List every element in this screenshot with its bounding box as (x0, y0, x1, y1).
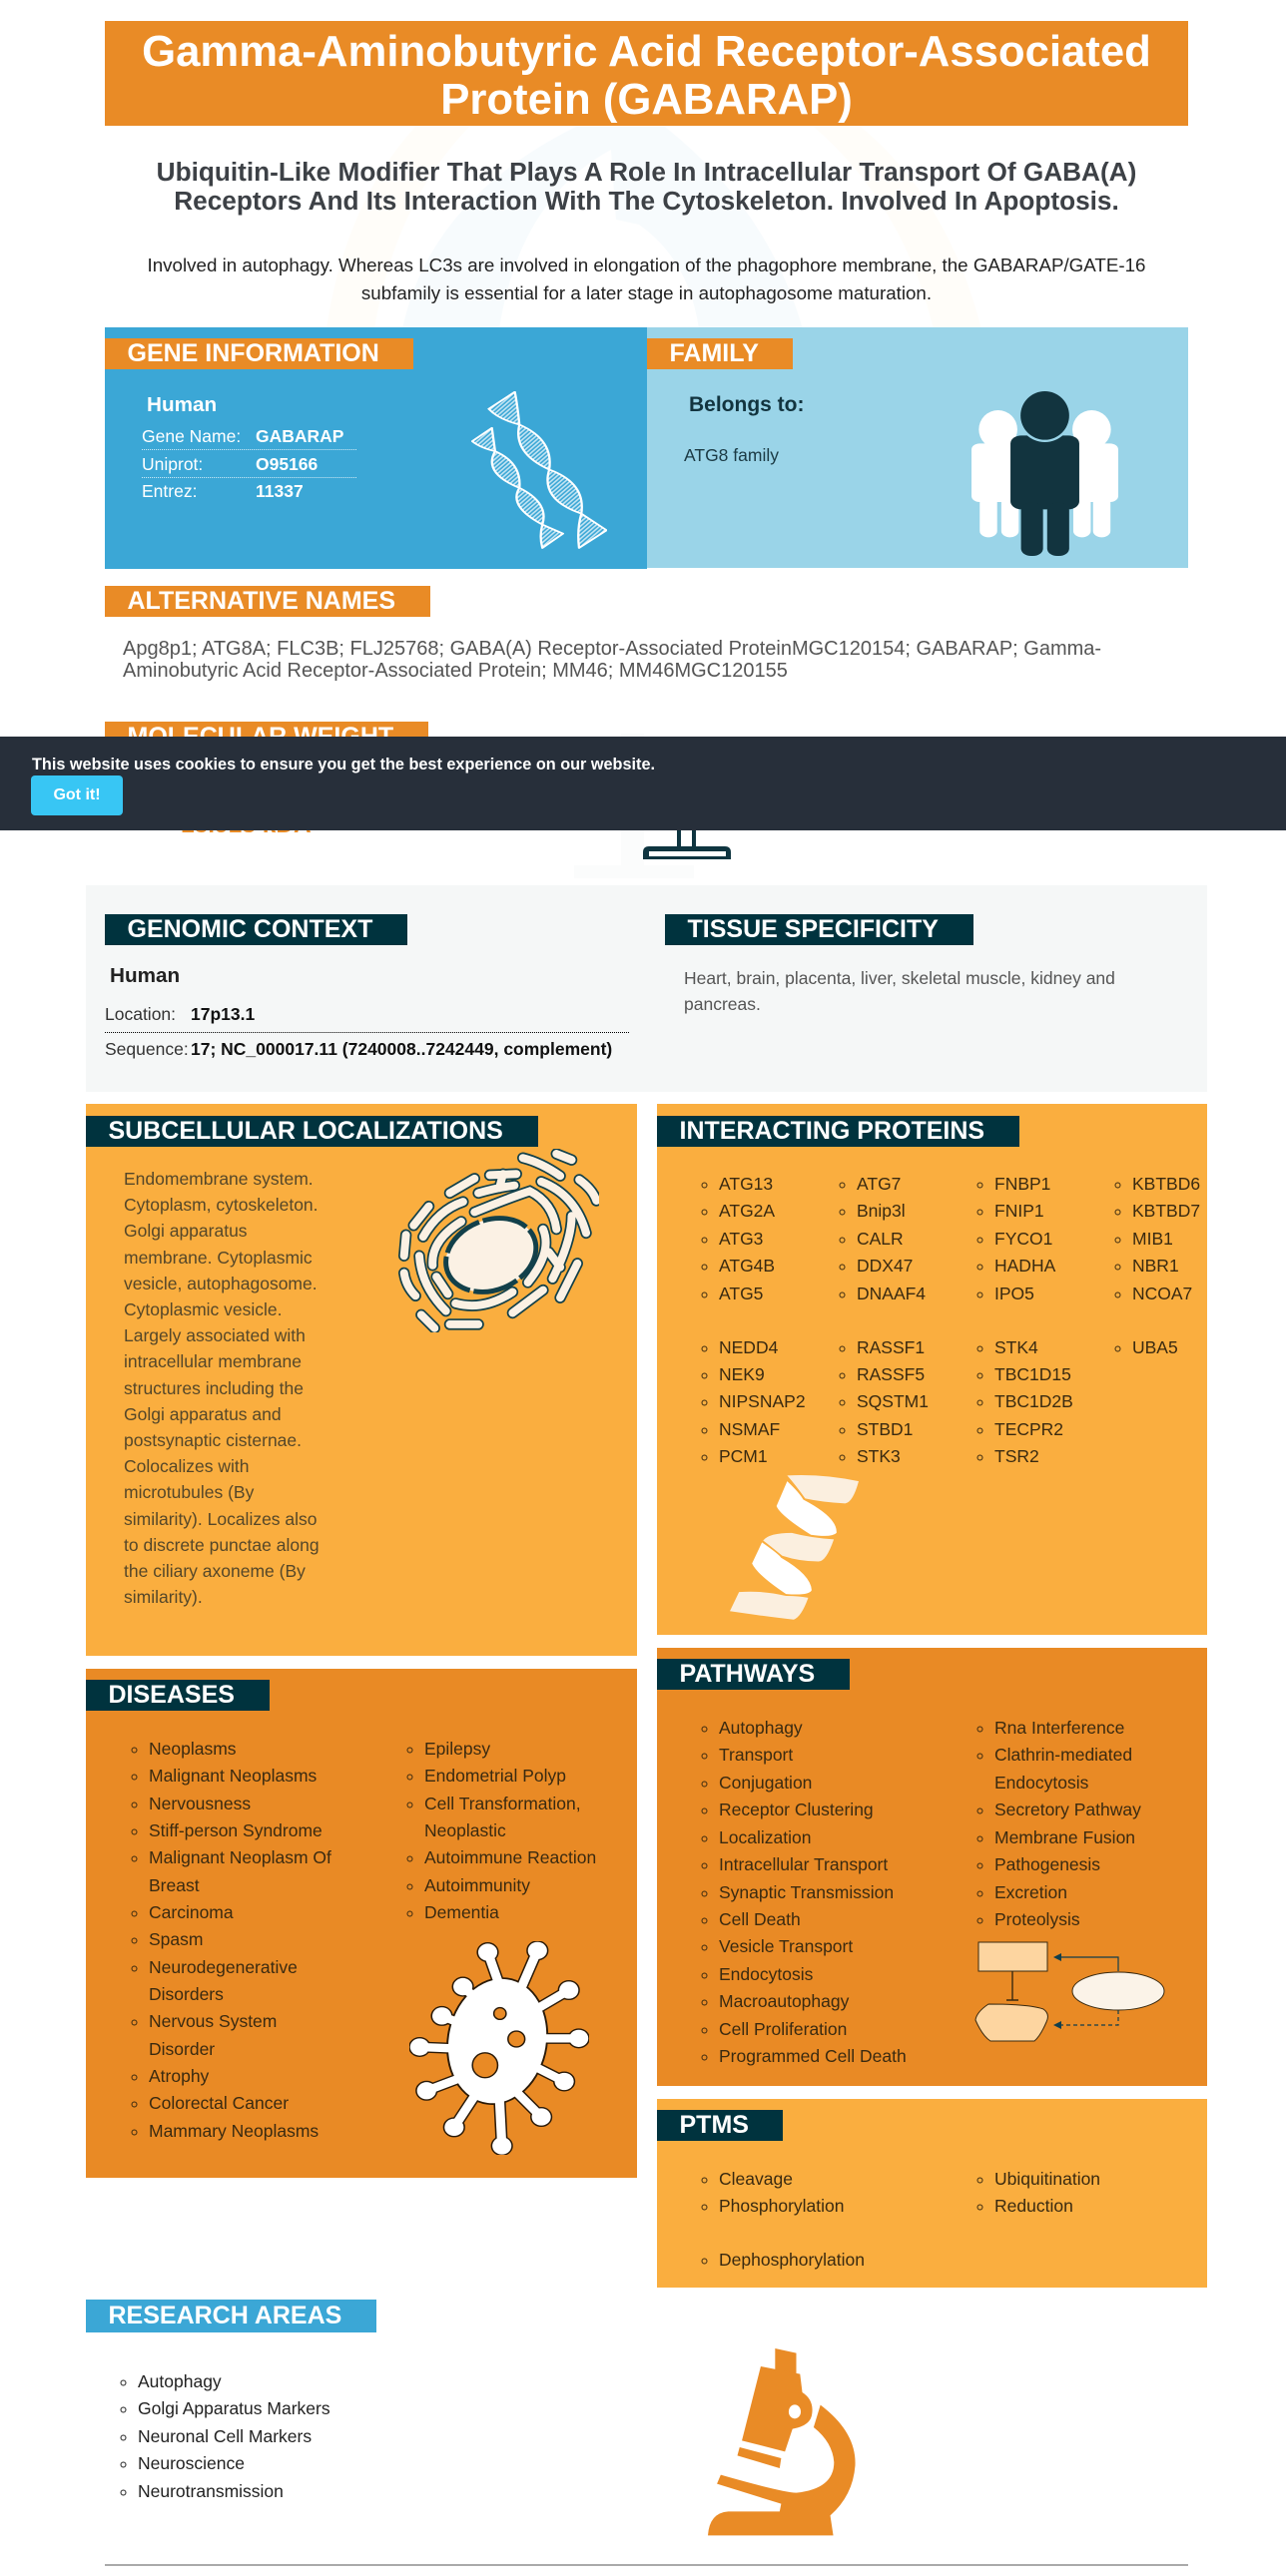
protein list: column 3 group 1: IPO5 (994, 1284, 1034, 1303)
research areas list: Autophagy (138, 2371, 222, 2391)
heading: interacting proteins: INTERACTING PROTEINS (679, 1117, 984, 1145)
tissue text: Heart, brain, placenta, liver, skeletal muscle, kidney and (684, 968, 1115, 988)
protein list: column 4 group 1 (1114, 1174, 1200, 1303)
panel: gene information (105, 327, 647, 569)
location row: Location: (105, 1004, 176, 1024)
protein list: column 3 group 1 (976, 1174, 1056, 1303)
panel: subcellular localizations (86, 1104, 637, 1656)
protein list: column 3 group 1: FNBP1 (994, 1174, 1050, 1194)
heading: research areas: RESEARCH AREAS (108, 2302, 341, 2329)
protein list: column 1 group 2: PCM1 (719, 1446, 768, 1466)
panel: genomic context and tissue specificity (86, 885, 1207, 1092)
protein list: column 2 group 2 (839, 1337, 929, 1466)
localization text: microtubules (By (124, 1482, 254, 1502)
localization text: Cytoplasm, cytoskeleton. (124, 1195, 319, 1215)
panel: ptms (657, 2099, 1207, 2288)
localization text: to discrete punctae along (124, 1535, 320, 1555)
pathway list: column 2: Rna Interference (994, 1718, 1124, 1738)
title banner: Gamma-Aminobutyric Acid Receptor-Associated (142, 27, 1151, 76)
species label: Human (110, 964, 180, 987)
pathway list: column 1: Autophagy (719, 1718, 803, 1738)
heading: diseases (86, 1680, 270, 1711)
species label: Human (147, 393, 217, 416)
icon: microscope (708, 2348, 856, 2535)
protein list: column 1 group 1 (701, 1174, 775, 1303)
subtitle (157, 157, 1136, 216)
heading: gene information: GENE INFORMATION (128, 339, 379, 367)
research areas list: Neuronal Cell Markers (138, 2426, 312, 2446)
ptm list: column 2 (976, 2169, 1100, 2216)
localization text (124, 1169, 320, 1607)
disease list: column 1: Disorder (149, 2039, 215, 2059)
protein list: column 1 group 1: ATG13 (719, 1174, 773, 1194)
tissue text (684, 968, 1115, 1014)
sequence row (105, 1039, 612, 1059)
pathway list: column 1: Intracellular Transport (719, 1854, 888, 1874)
protein list: column 2 group 2: STK3 (857, 1446, 901, 1466)
belongs to label: Belongs to: (689, 393, 805, 416)
disease list: column 2: Autoimmunity (424, 1875, 530, 1895)
panel: genomic context and tissue specificity: 17; NC_000017.11 (7240008..7242449, complement) (191, 1039, 612, 1059)
protein list: column 3 group 2: TSR2 (994, 1446, 1039, 1466)
protein list: column 4 group 1: NCOA7 (1132, 1284, 1192, 1303)
localization text: Largely associated with (124, 1325, 306, 1345)
disease list: column 1: Malignant Neoplasm Of (149, 1847, 331, 1867)
pathway list: column 2: Pathogenesis (994, 1854, 1100, 1874)
localization text: Golgi apparatus and (124, 1404, 282, 1424)
protein list: column 3 group 2: TECPR2 (994, 1419, 1063, 1439)
protein list: column 4 group 1: KBTBD6 (1132, 1174, 1200, 1194)
panel: interacting proteins (657, 1104, 1207, 1635)
disease list: column 1: Mammary Neoplasms (149, 2121, 319, 2141)
cookie message: This website uses cookies to ensure you get the best experience on our website. (32, 756, 655, 773)
localization text: postsynaptic cisternae. (124, 1430, 302, 1450)
icon: DNA helix (471, 391, 607, 549)
location row: 17p13.1 (191, 1004, 255, 1024)
disease list: column 1: Breast (149, 1875, 200, 1895)
icon: virus (409, 1941, 589, 2155)
disease list: column 1: Colorectal Cancer (149, 2093, 289, 2113)
protein list: column 2 group 2: RASSF1 (857, 1337, 925, 1357)
protein list: column 2 group 2: RASSF5 (857, 1364, 925, 1384)
localization text: Cytoplasmic vesicle. (124, 1299, 283, 1319)
disease list: column 1: Malignant Neoplasms (149, 1766, 317, 1786)
pathway list: column 1: Receptor Clustering (719, 1800, 874, 1819)
heading: tissue specificity: TISSUE SPECIFICITY (687, 915, 939, 943)
protein list: column 2 group 1 (839, 1174, 926, 1303)
gene name row (142, 424, 356, 450)
disease list: column 1: Neurodegenerative (149, 1957, 298, 1977)
localization text: vesicle, autophagosome. (124, 1274, 318, 1293)
disease list: column 2 (407, 1739, 596, 1922)
alternative names text: Apg8p1; ATG8A; FLC3B; FLJ25768; GABA(A) Receptor-Associated ProteinMGC120154; GABARAP; Gamma- (123, 638, 1101, 660)
molecular weight value: 13.918 kDA (181, 811, 312, 838)
subtitle: Ubiquitin-Like Modifier That Plays A Role In Intracellular Transport Of GABA(A) (157, 157, 1136, 187)
protein list: column 1 group 2: NIPSNAP2 (719, 1391, 806, 1411)
protein list: column 2 group 2: SQSTM1 (857, 1391, 929, 1411)
subtitle: Receptors And Its Interaction With The Cytoskeleton. Involved In Apoptosis. (174, 186, 1119, 216)
heading: diseases: DISEASES (108, 1681, 235, 1709)
icon: organelle (398, 1149, 599, 1332)
sequence row: Sequence: (105, 1039, 189, 1059)
disease list: column 1: Stiff-person Syndrome (149, 1820, 322, 1840)
pathway list: column 2: Excretion (994, 1882, 1067, 1902)
protein list: column 3 group 2 (976, 1337, 1073, 1466)
disease list: column 1: Carcinoma (149, 1902, 234, 1922)
protein list: column 1 group 2 (701, 1337, 806, 1466)
heading: family (647, 338, 793, 369)
heading: research areas (86, 2300, 376, 2332)
disease list: column 2: Endometrial Polyp (424, 1766, 566, 1786)
pathway list: column 1: Endocytosis (719, 1964, 813, 1984)
heading: ptms: PTMS (679, 2111, 749, 2139)
description: subfamily is essential for a later stage in autophagosome maturation. (361, 282, 932, 303)
protein list: column 3 group 1: HADHA (994, 1256, 1055, 1276)
diagram: pathway schematic (974, 1942, 1164, 2042)
heading: alternative names: ALTERNATIVE NAMES (128, 587, 395, 615)
protein list: column 1 group 1: ATG5 (719, 1284, 763, 1303)
ptm list: column 1 (701, 2169, 865, 2270)
protein list: column 3 group 2: TBC1D2B (994, 1391, 1073, 1411)
disease list: column 2: Cell Transformation, (424, 1794, 581, 1813)
protein list: column 3 group 1: FYCO1 (994, 1229, 1052, 1249)
ptm list: column 1: Phosphorylation (719, 2196, 845, 2216)
uniprot row (142, 452, 356, 478)
footer rule (105, 2564, 1188, 2566)
disease list: column 1: Nervousness (149, 1794, 251, 1813)
disease list: column 1: Neoplasms (149, 1739, 237, 1759)
title banner: Protein (GABARAP) (440, 74, 853, 124)
disease list: column 2: Neoplastic (424, 1820, 506, 1840)
localization text: similarity). (124, 1587, 203, 1607)
disease list: column 1: Disorders (149, 1984, 224, 2004)
panel: diseases (86, 1669, 637, 2178)
pathway list: column 1: Transport (719, 1745, 793, 1765)
protein list: column 1 group 1: ATG2A (719, 1201, 775, 1221)
entrez row: Entrez: (142, 481, 197, 501)
tissue text: pancreas. (684, 994, 761, 1014)
gene name row: Gene Name: (142, 426, 241, 446)
disease list: column 2: Epilepsy (424, 1739, 490, 1759)
entrez row (142, 481, 304, 501)
protein list: column 3 group 2: TBC1D15 (994, 1364, 1071, 1384)
gene name row: GABARAP (256, 426, 343, 446)
alternative names text: Aminobutyric Acid Receptor-Associated Protein; MM46; MM46MGC120155 (123, 660, 788, 682)
pathway list: column 1 (701, 1718, 907, 2066)
protein list: column 1 group 1: ATG4B (719, 1256, 775, 1276)
pathway list: column 1: Cell Proliferation (719, 2019, 847, 2039)
protein list: column 1 group 2: NEDD4 (719, 1337, 778, 1357)
description: Involved in autophagy. Whereas LC3s are involved in elongation of the phagophore membrane, the GABARAP/GATE-16 (148, 255, 1145, 275)
family name: ATG8 family (684, 445, 779, 465)
cookie button: Got it! (53, 786, 101, 803)
disease list: column 1: Spasm (149, 1929, 203, 1949)
localization text: intracellular membrane (124, 1351, 302, 1371)
uniprot row: O95166 (256, 454, 318, 474)
protein list: column 1 group 1: ATG3 (719, 1229, 763, 1249)
icon: people (971, 391, 1118, 556)
title banner (105, 21, 1188, 126)
disease list: column 1 (132, 1739, 331, 2141)
localization text: similarity). Localizes also (124, 1509, 318, 1529)
protein list: column 3 group 2: STK4 (994, 1337, 1038, 1357)
pathway list: column 2: Clathrin-mediated (994, 1745, 1132, 1765)
research areas list: Neuroscience (138, 2453, 245, 2473)
heading: pathways: PATHWAYS (679, 1660, 815, 1688)
localization text: the ciliary axoneme (By (124, 1561, 306, 1581)
pathway list: column 2: Membrane Fusion (994, 1827, 1135, 1847)
pathway list: column 1: Cell Death (719, 1909, 801, 1929)
protein list: column 3 group 1: FNIP1 (994, 1201, 1044, 1221)
ptm list: column 1: Dephosphorylation (719, 2250, 865, 2270)
background watermark (0, 0, 1286, 898)
heading: subcellular localizations: SUBCELLULAR LOCALIZATIONS (108, 1117, 503, 1145)
panel: family (647, 327, 1188, 568)
icon: monitor stand (643, 830, 731, 859)
location row (105, 1002, 629, 1033)
localization text: structures including the (124, 1378, 304, 1398)
pathway list: column 1: Vesicle Transport (719, 1936, 853, 1956)
pathway list: column 1: Localization (719, 1827, 811, 1847)
protein list: column 2 group 1: ATG7 (857, 1174, 901, 1194)
pathway list: column 1: Conjugation (719, 1773, 812, 1793)
disease list: column 1: Atrophy (149, 2066, 209, 2086)
protein list: column 2 group 2: STBD1 (857, 1419, 913, 1439)
protein list: column 2 group 1: DDX47 (857, 1256, 913, 1276)
protein list: column 2 group 1: CALR (857, 1229, 904, 1249)
pathway list: column 2: Secretory Pathway (994, 1800, 1141, 1819)
pathway list: column 1: Macroautophagy (719, 1991, 849, 2011)
cookie banner (0, 737, 1286, 830)
entrez row: 11337 (256, 481, 304, 501)
ptm list: column 2: Reduction (994, 2196, 1073, 2216)
heading: family: FAMILY (669, 339, 759, 367)
research areas list (120, 2371, 330, 2501)
localization text: membrane. Cytoplasmic (124, 1248, 313, 1268)
pathway list: column 2: Endocytosis (994, 1773, 1088, 1793)
disease list: column 1: Nervous System (149, 2011, 277, 2031)
localization text: Golgi apparatus (124, 1221, 248, 1241)
protein list: column 4 group 1: KBTBD7 (1132, 1201, 1200, 1221)
ptm list: column 1: Cleavage (719, 2169, 793, 2189)
alternative names text (123, 638, 1101, 682)
protein list: column 4 group 1: MIB1 (1132, 1229, 1173, 1249)
localization text: Colocalizes with (124, 1456, 249, 1476)
disease list: column 2: Autoimmune Reaction (424, 1847, 596, 1867)
pathway list: column 2: Proteolysis (994, 1909, 1080, 1929)
research areas list: Golgi Apparatus Markers (138, 2398, 330, 2418)
protein list: column 4 group 2: UBA5 (1132, 1337, 1178, 1357)
pathway list: column 1: Programmed Cell Death (719, 2046, 907, 2066)
panel: pathways (657, 1648, 1207, 2086)
ptm list: column 2: Ubiquitination (994, 2169, 1100, 2189)
heading: molecular weight: MOLECULAR WEIGHT (128, 723, 393, 751)
uniprot row: Uniprot: (142, 454, 203, 474)
pathway list: column 2 (976, 1718, 1141, 1929)
protein list: column 1 group 2: NSMAF (719, 1419, 780, 1439)
description (148, 255, 1145, 303)
cookie button (31, 775, 123, 815)
pathway list: column 1: Synaptic Transmission (719, 1882, 894, 1902)
heading: genomic context: GENOMIC CONTEXT (128, 915, 372, 943)
icon: protein ribbon (730, 1475, 859, 1620)
protein list: column 2 group 1: DNAAF4 (857, 1284, 926, 1303)
localization text: Endomembrane system. (124, 1169, 314, 1189)
protein list: column 2 group 1: Bnip3l (857, 1201, 906, 1221)
research areas list: Neurotransmission (138, 2481, 284, 2501)
heading: ptms (657, 2110, 783, 2141)
disease list: column 2: Dementia (424, 1902, 499, 1922)
heading: pathways (657, 1659, 850, 1690)
protein list: column 4 group 1: NBR1 (1132, 1256, 1179, 1276)
protein list: column 1 group 2: NEK9 (719, 1364, 765, 1384)
